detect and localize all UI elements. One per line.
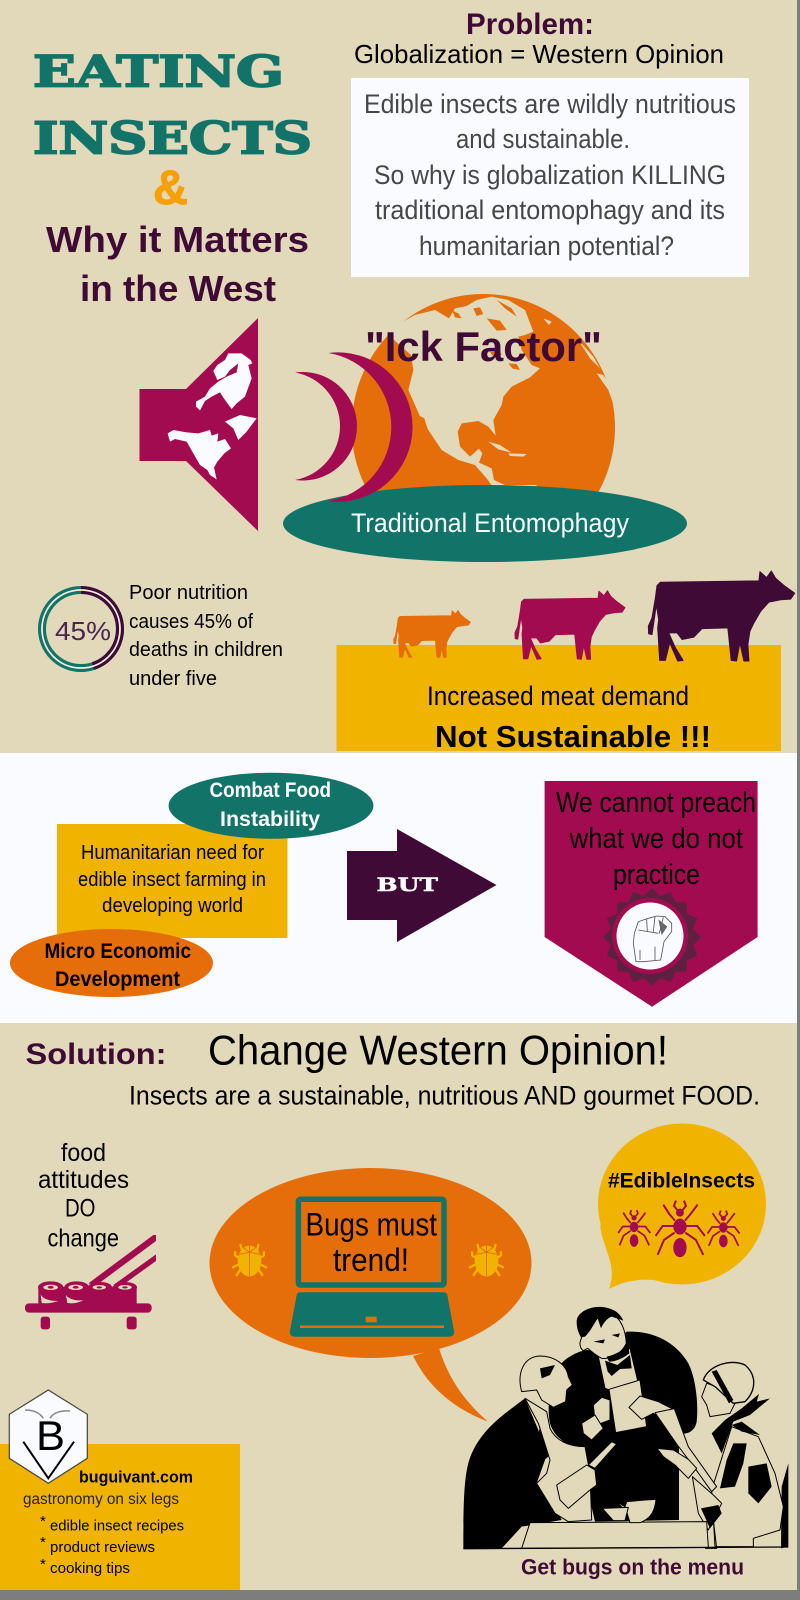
title: Eating Insects: EATING: [33, 48, 284, 98]
ellipse: Traditional Entomophagy: Traditional Entomophagy: [351, 508, 629, 538]
speech bubble: EdibleInsects: #EdibleInsects: [608, 1170, 755, 1192]
icon: raised fist badge: [603, 888, 701, 986]
pennant: We cannot preach: [545, 781, 758, 1007]
icon: large purple cow: [648, 571, 795, 661]
subtitle: Why it Matters in the West: in the West: [80, 268, 276, 309]
panel: buguivant: cooking tips: [50, 1560, 130, 1577]
panel: meat demand: [336, 645, 781, 754]
text: poor nutrition: [129, 582, 283, 690]
text: food attitudes do change: DO: [65, 1194, 96, 1222]
panel: buguivant: buguivant.com: [79, 1468, 193, 1487]
heading: Change Western Opinion: Change Western Opinion!: [208, 1026, 668, 1074]
chart: 45% donut: 45%: [55, 616, 111, 646]
text: insects are sustainable: Insects are a sustainable, nutritious AND gourmet FOOD.: [129, 1080, 760, 1110]
panel: meat demand: Increased meat demand: [427, 681, 689, 711]
icon: sound wave crescents: [295, 352, 413, 502]
ellipse: Combat Food Instability: Combat Food: [210, 779, 331, 802]
text: poor nutrition: deaths in children: [129, 639, 283, 661]
panel: problem statement: So why is globalization KILLING: [374, 160, 726, 190]
logo: BV hexagon: B: [36, 1412, 65, 1459]
panel: humanitarian need: developing world: [102, 895, 243, 917]
panel: buguivant: *: [40, 1513, 46, 1530]
icon: laptop: [290, 1199, 454, 1337]
panel: humanitarian need: edible insect farming in: [78, 869, 266, 891]
heading: Ick Factor: "Ick Factor": [365, 323, 602, 370]
icon: small orange cow: [394, 611, 470, 657]
speech bubble: EdibleInsects: [598, 1124, 766, 1289]
arrow: BUT: [347, 829, 496, 942]
caption: Get bugs on the menu: Get bugs on the menu: [521, 1554, 744, 1580]
icon: left beetle: [232, 1244, 267, 1276]
illustration: waiter and diners: [463, 1307, 788, 1549]
heading: Solution: Solution:: [26, 1038, 166, 1071]
waiter: [549, 1307, 697, 1522]
title: Eating Insects: [33, 48, 312, 164]
text: food attitudes do change: attitudes: [38, 1166, 129, 1194]
icon: right beetle: [469, 1244, 504, 1276]
pennant: We cannot preach: We cannot preach: [556, 787, 756, 819]
panel: problem statement: humanitarian potential?: [419, 231, 674, 261]
icon: centre ant: [656, 1201, 705, 1257]
woman: [655, 1362, 788, 1548]
left diner: [463, 1356, 617, 1548]
pennant: We cannot preach: practice: [613, 859, 700, 891]
ampersand: &: [153, 162, 188, 215]
arrow: BUT: BUT: [376, 874, 438, 896]
text: food attitudes do change: [38, 1139, 129, 1252]
ellipse: Combat Food Instability: [169, 773, 373, 839]
icon: laptop: Bugs must: [306, 1206, 437, 1242]
panel: buguivant: *: [40, 1534, 46, 1551]
icon: orange globe: [352, 294, 615, 561]
text: poor nutrition: Poor nutrition: [129, 582, 248, 604]
heading: Problem: Problem:: [466, 8, 594, 41]
panel: buguivant: gastronomy on six legs: [23, 1491, 179, 1508]
speech bubble: orange laptop: [210, 1168, 532, 1422]
ellipse: Traditional Entomophagy: [283, 485, 687, 562]
panel: buguivant: edible insect recipes: [50, 1517, 184, 1534]
panel: problem statement: traditional entomophagy and its: [375, 195, 725, 225]
logo: BV hexagon: [9, 1390, 87, 1483]
panel: buguivant: product reviews: [50, 1539, 155, 1556]
ellipse: Combat Food Instability: Instability: [220, 808, 320, 831]
pennant: We cannot preach: what we do not: [569, 823, 743, 855]
ellipse: Micro Economic Development: Micro Economic: [44, 940, 191, 963]
text: food attitudes do change: change: [48, 1224, 119, 1252]
panel: meat demand: Not Sustainable !!!: [435, 719, 711, 754]
icon: laptop: trend!: [333, 1242, 409, 1278]
icon: right ant: [708, 1211, 740, 1247]
panel: buguivant: [0, 1444, 240, 1590]
icon: left ant: [618, 1210, 650, 1247]
panel: humanitarian need: [57, 824, 288, 938]
icon: speaker with continents: [140, 318, 258, 531]
title: Eating Insects: INSECTS: [33, 114, 312, 164]
text: poor nutrition: causes 45% of: [129, 611, 253, 633]
subtitle: Why it Matters in the West: [46, 219, 309, 309]
subheading: Globalization = Western Opinion: Globalization = Western Opinion: [354, 39, 724, 69]
text: poor nutrition: under five: [129, 668, 217, 690]
subtitle: Why it Matters in the West: Why it Matters: [46, 219, 309, 260]
text: food attitudes do change: food: [61, 1139, 106, 1167]
panel: problem statement: and sustainable.: [456, 124, 630, 154]
panel: problem statement: [351, 78, 749, 277]
panel: buguivant: *: [40, 1556, 46, 1573]
chart: 45% donut: [42, 590, 120, 668]
icon: sushi on tray with chopsticks: [25, 1235, 156, 1329]
panel: humanitarian need: Humanitarian need for: [81, 842, 264, 864]
table and teapot: [463, 1495, 788, 1549]
icon: medium magenta cow: [515, 591, 625, 659]
panel: problem statement: Edible insects are wildly nutritious: [364, 89, 736, 119]
ellipse: Micro Economic Development: [10, 929, 213, 997]
ellipse: Micro Economic Development: Development: [55, 968, 180, 991]
